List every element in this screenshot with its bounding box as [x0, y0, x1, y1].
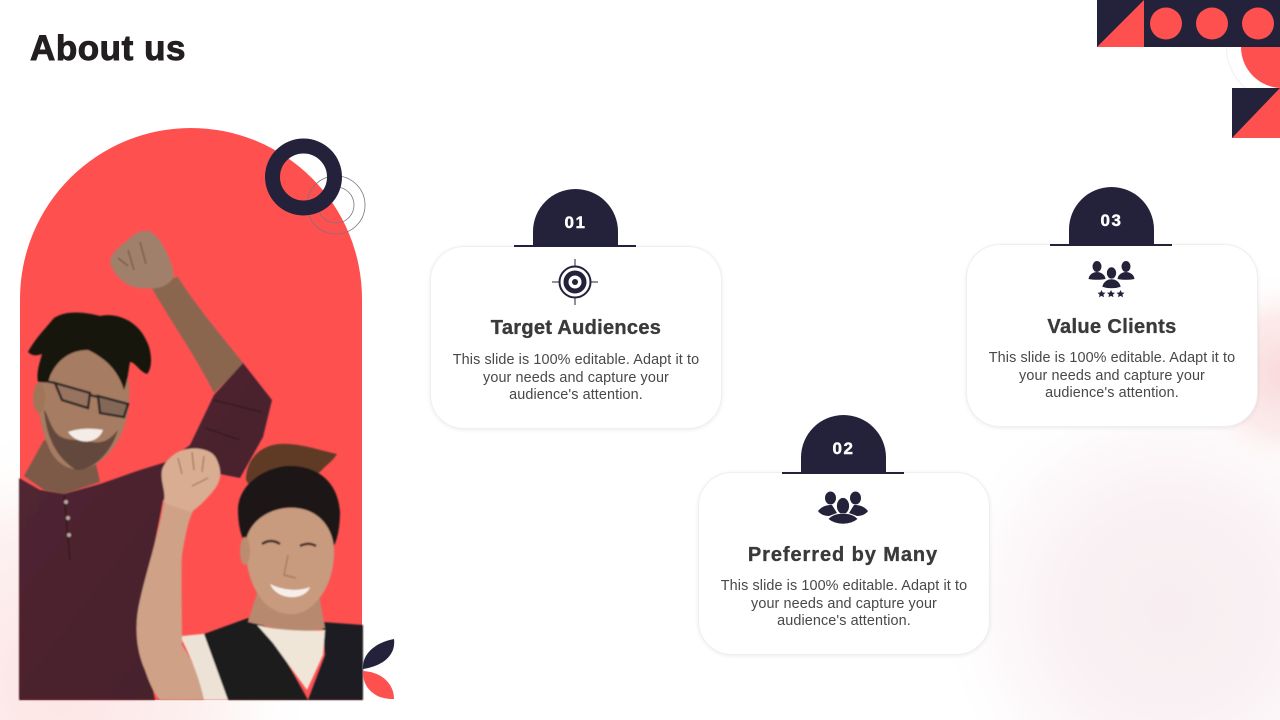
icon: target — [552, 259, 598, 305]
photo: two people with raised fists — [19, 231, 363, 700]
woman blouse — [257, 625, 325, 690]
title: About us — [30, 29, 186, 68]
panel: Value Clients card — [966, 244, 1258, 427]
woman fist — [162, 448, 220, 512]
thin concentric circles — [307, 176, 365, 234]
woman neck — [248, 590, 325, 634]
woman face — [246, 508, 334, 614]
heading: Preferred by Many: Preferred by Many — [748, 544, 938, 566]
badge: 03: 03 — [1101, 211, 1122, 230]
badge: 01: 01 — [565, 213, 586, 232]
icon: group of people — [818, 492, 868, 524]
rule: card 2 — [782, 472, 904, 474]
text: description: your needs and capture your — [751, 596, 937, 612]
text: description — [989, 350, 1235, 401]
badge: 03 — [1069, 187, 1154, 244]
text: description: This slide is 100% editable. Adapt it to — [453, 352, 699, 368]
man smile — [68, 429, 103, 442]
woman smile — [270, 584, 310, 597]
heading: Value Clients: Value Clients — [1047, 316, 1177, 338]
panel: Target Audiences card — [430, 246, 722, 429]
man fist — [110, 231, 174, 288]
top-right geometry — [1097, 0, 1280, 138]
heading: Target Audiences: Target Audiences — [491, 317, 661, 339]
badge: 01 — [533, 189, 618, 246]
man neck — [24, 440, 100, 494]
shirt buttons — [64, 500, 71, 537]
text: description: audience's attention. — [509, 387, 643, 403]
rule: card 1 — [514, 245, 636, 247]
woman hair bun — [246, 444, 337, 490]
rule: card 3 — [1050, 244, 1172, 246]
icon: clients with stars — [1088, 261, 1134, 298]
text: description: This slide is 100% editable. Adapt it to — [721, 578, 967, 594]
dark ring — [272, 146, 334, 208]
woman eyes — [262, 541, 316, 546]
text: description: your needs and capture your — [1019, 368, 1205, 384]
badge: 02 — [801, 415, 886, 472]
woman arm — [137, 500, 204, 700]
woman hair — [238, 466, 340, 548]
woman vest — [204, 618, 308, 700]
text: description: audience's attention. — [777, 613, 911, 629]
man raised arm — [150, 277, 244, 393]
man face — [38, 345, 129, 469]
text: description: audience's attention. — [1045, 385, 1179, 401]
woman tee — [182, 633, 230, 700]
man hair — [28, 312, 151, 390]
text: description: This slide is 100% editable. Adapt it to — [989, 350, 1235, 366]
man beard — [44, 410, 118, 470]
badge: 02: 02 — [833, 439, 854, 458]
leaves — [363, 639, 394, 699]
man shirt — [19, 363, 272, 700]
text: description: your needs and capture your — [483, 370, 669, 386]
red arch — [20, 128, 362, 700]
background glows — [0, 270, 1280, 720]
man glasses — [45, 381, 128, 417]
text: description — [453, 352, 699, 403]
text: description — [721, 578, 967, 629]
panel: Preferred by Many card — [698, 472, 990, 655]
